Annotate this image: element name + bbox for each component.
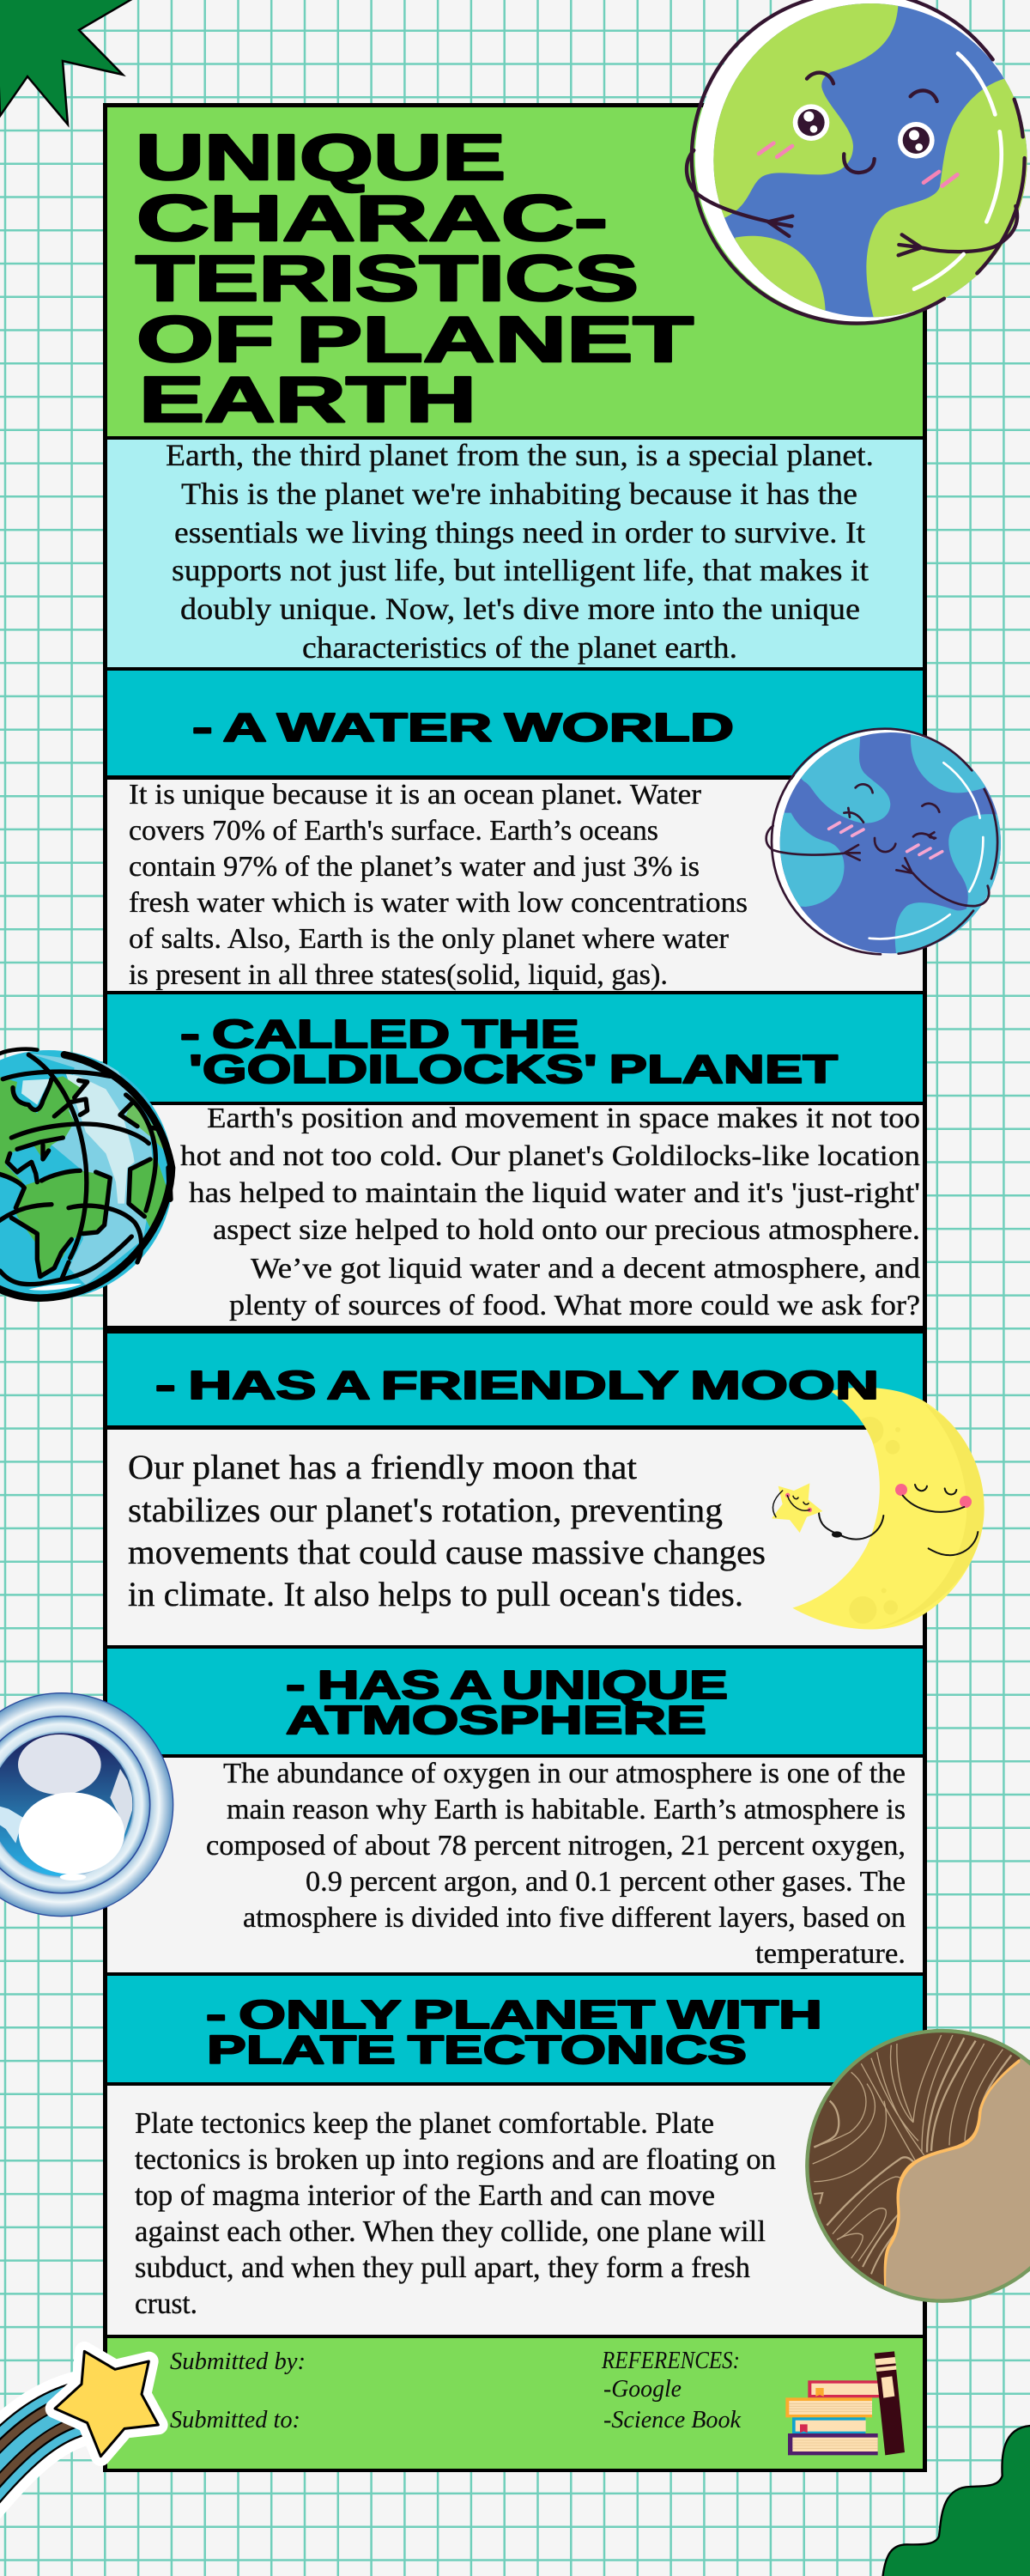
heading: unique atmosphere (286, 1662, 728, 1742)
title: CHARAC- (136, 182, 608, 254)
text block: plate tectonics (135, 2106, 776, 2320)
title: EARTH (139, 363, 476, 435)
text block: atmosphere (206, 1758, 906, 1970)
text block: atmosphere: main reason why Earth is habitable. Earth’s atmosphere is (227, 1794, 906, 1826)
text block: goldilocks (180, 1103, 920, 1321)
text block: moon: movements that could cause massive changes (128, 1533, 766, 1571)
footer: submission credits: Submitted by: (170, 2348, 306, 2375)
heading: unique atmosphere: - HAS A UNIQUE (286, 1662, 728, 1707)
corner burst: top left (0, 0, 135, 125)
corner blob: bottom right (882, 2426, 1030, 2576)
text block: goldilocks: hot and not too cold. Our planet's Goldilocks-like location (180, 1140, 920, 1172)
text block: plate tectonics: Plate tectonics keep the planet comfortable. Plate (135, 2106, 714, 2140)
icon: tectonic plate cross-section (805, 2029, 1030, 2333)
text block: atmosphere: 0.9 percent argon, and 0.1 percent other gases. The (306, 1866, 906, 1898)
icon: atmosphere globe (0, 1693, 173, 1917)
title: OF PLANET (136, 303, 694, 375)
text block: plate tectonics: subduct, and when they pull apart, they form a fresh (135, 2251, 750, 2284)
text block: plate tectonics: against each other. When they collide, one plane will (135, 2215, 766, 2248)
text block: plate tectonics: tectonics is broken up into regions and are floating on (135, 2142, 776, 2176)
heading: plate tectonics (206, 1992, 822, 2072)
icon: clip-art globe with continents (0, 1049, 173, 1300)
text block: goldilocks: has helped to maintain the liquid water and it's 'just-right' (189, 1177, 920, 1209)
icon: sleeping crescent moon with star (772, 1388, 985, 1630)
text block: goldilocks: Earth's position and movement in space makes it not too (207, 1103, 920, 1134)
text block: water world: covers 70% of Earth's surface. Earth’s oceans (129, 815, 658, 847)
heading: goldilocks planet: 'GOLDILOCKS' PLANET (189, 1047, 838, 1091)
text block: moon: stabilizes our planet's rotation, preventing (128, 1491, 723, 1529)
heading: plate tectonics: PLATE TECTONICS (207, 2027, 747, 2072)
text block: plate tectonics: top of magma interior of the Earth and can move (135, 2178, 715, 2212)
icon: stack of books (785, 2351, 905, 2455)
text block: moon: Our planet has a friendly moon that (128, 1448, 637, 1486)
intro text block: essentials we living things need in order to survive. It (174, 515, 865, 550)
intro text block (166, 438, 874, 665)
text block: atmosphere: atmosphere is divided into five different layers, based on (243, 1902, 906, 1934)
heading: friendly moon: - HAS A FRIENDLY MOON (155, 1363, 879, 1407)
text block: atmosphere: temperature. (755, 1938, 906, 1970)
footer: references: REFERENCES: (601, 2348, 740, 2374)
icon: smiling blue earth (765, 727, 1001, 956)
text block: goldilocks: aspect size helped to hold onto our precious atmosphere. (213, 1214, 920, 1246)
icon: shooting star with rainbow trail (0, 2351, 158, 2501)
footer: submission credits (170, 2348, 306, 2433)
heading: a water world: - A WATER WORLD (192, 705, 734, 750)
footer: references: -Google (603, 2376, 682, 2403)
intro text block: characteristics of the planet earth. (302, 630, 737, 665)
text block: goldilocks: plenty of sources of food. What more could we ask for? (229, 1290, 920, 1321)
text block: water world (129, 779, 748, 991)
text block: atmosphere: The abundance of oxygen in our atmosphere is one of the (223, 1758, 906, 1789)
intro text block: Earth, the third planet from the sun, is a special planet. (166, 438, 874, 472)
heading: goldilocks planet: - CALLED THE (180, 1012, 579, 1056)
heading: unique atmosphere: ATMOSPHERE (286, 1698, 706, 1742)
icon: smiling green earth (685, 0, 1027, 325)
text block: moon: in climate. It also helps to pull ocean's tides. (128, 1575, 743, 1613)
text block: water world: of salts. Also, Earth is the only planet where water (129, 923, 730, 955)
text block: moon (128, 1448, 766, 1613)
text block: water world: fresh water which is water with low concentrations (129, 887, 748, 919)
text block: water world: is present in all three states(solid, liquid, gas). (129, 959, 668, 991)
footer: references: -Science Book (603, 2407, 742, 2433)
intro text block: doubly unique. Now, let's dive more into the unique (180, 592, 860, 626)
title: UNIQUE (136, 121, 506, 193)
text block: plate tectonics: crust. (135, 2287, 197, 2320)
text block: water world: It is unique because it is an ocean planet. Water (129, 779, 702, 811)
text block: water world: contain 97% of the planet’s water and just 3% is (129, 851, 700, 883)
intro text block: supports not just life, but intelligent life, that makes it (172, 553, 869, 587)
text block: atmosphere: composed of about 78 percent nitrogen, 21 percent oxygen, (206, 1830, 906, 1862)
intro text block: This is the planet we're inhabiting because it has the (181, 477, 857, 511)
heading: goldilocks planet (180, 1012, 838, 1091)
text block: goldilocks: We’ve got liquid water and a decent atmosphere, and (251, 1253, 920, 1285)
footer: submission credits: Submitted to: (170, 2407, 300, 2433)
title (136, 121, 694, 435)
main panel frame and section bands (103, 103, 927, 2472)
heading: plate tectonics: - ONLY PLANET WITH (206, 1992, 822, 2037)
title: TERISTICS (136, 242, 639, 314)
footer: references (601, 2348, 742, 2433)
